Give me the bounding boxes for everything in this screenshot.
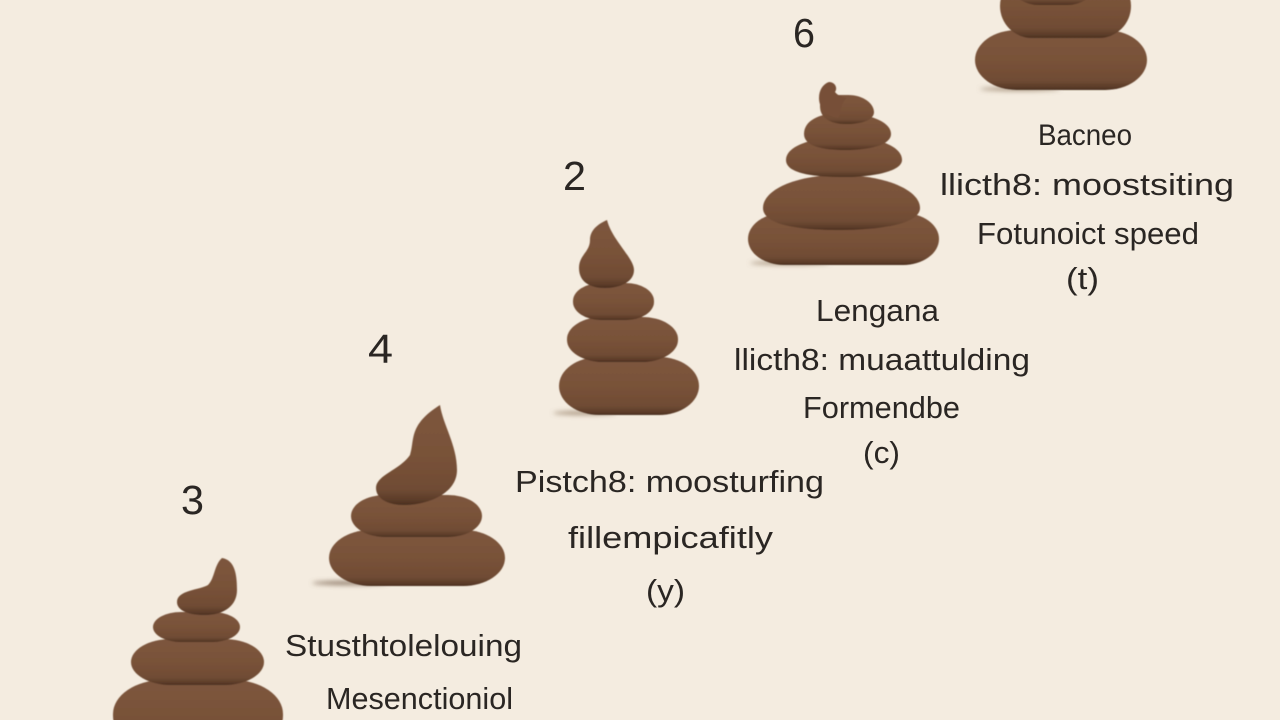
number 3: 3 <box>181 477 204 523</box>
label: number 6 pile: llicth8: muaattulding <box>734 342 1030 377</box>
pile: number 6 <box>748 82 939 265</box>
label: top right: llicth8: moostsiting <box>940 167 1234 202</box>
label: number 2 pile: (y) <box>646 573 685 608</box>
label: top right <box>940 119 1234 296</box>
label: number 2 pile: Pistch8: moosturfing <box>515 464 824 499</box>
label: number 4 pile: Stusthtolelouing <box>285 628 522 663</box>
pile: number 3 <box>113 558 283 720</box>
label: number 2 pile <box>515 464 824 608</box>
pile: number 4 <box>312 405 505 586</box>
label: top right: Fotunoict speed <box>977 216 1199 251</box>
label: top right: (t) <box>1066 261 1099 296</box>
label: number 6 pile: Lengana <box>816 293 940 328</box>
label: number 2 pile: fillempicafitly <box>568 520 774 555</box>
number 4: 4 <box>368 326 393 372</box>
label: number 4 pile: Mesenctioniol <box>326 681 513 716</box>
label: number 4 pile <box>285 628 522 716</box>
label: top right: Bacneo <box>1038 119 1132 152</box>
pile: number 2 <box>553 220 699 415</box>
number 6: 6 <box>793 10 815 56</box>
pile: top right <box>975 0 1147 91</box>
label: number 6 pile <box>734 293 1030 470</box>
label: number 6 pile: Formendbe <box>803 390 960 425</box>
number 2: 2 <box>563 153 586 199</box>
label: number 6 pile: (c) <box>863 435 900 470</box>
